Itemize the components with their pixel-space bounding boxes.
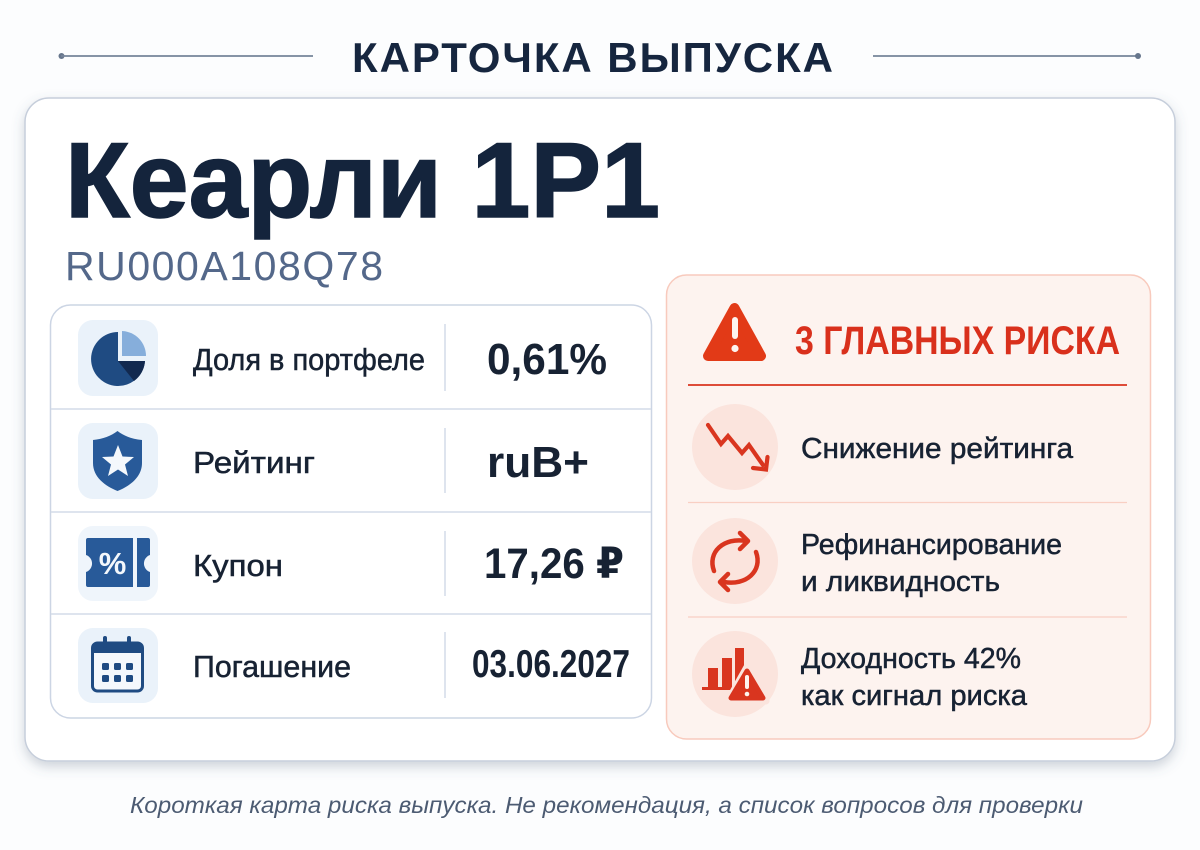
icon: falling chart arrow (692, 404, 778, 490)
page header (58, 34, 1141, 81)
panel: issue parameters (50, 305, 652, 718)
risk 2 text: и ликвидность (801, 566, 1000, 598)
page header: КАРТОЧКА ВЫПУСКА (352, 34, 833, 81)
row: coupon label: Купон (193, 548, 283, 583)
row: rating label: Рейтинг (193, 445, 315, 480)
risk 2 text (801, 529, 1062, 598)
issue title: Кеарли 1Р1 (65, 120, 660, 240)
risks heading: 3 ГЛАВНЫХ РИСКА (795, 319, 1120, 363)
footer note: Короткая карта риска выпуска. Не рекомендация, а список вопросов для проверки (130, 792, 1083, 818)
icon: calendar (78, 628, 158, 703)
row: coupon value: 17,26 ₽ (484, 540, 624, 588)
main card (25, 98, 1175, 761)
icon: coupon ticket (78, 526, 158, 601)
icon: refinancing cycle arrows (692, 518, 778, 604)
row: maturity label: Погашение (193, 649, 351, 684)
icon: warning triangle (708, 308, 761, 356)
risk 3 text: как сигнал риска (801, 680, 1028, 712)
icon: yield bars with warning (692, 631, 778, 717)
icon: shield with star (78, 423, 158, 499)
panel: three main risks (666, 275, 1150, 739)
risk 1 text: Снижение рейтинга (801, 433, 1074, 465)
risk 3 text: Доходность 42% (801, 643, 1021, 675)
row: maturity value: 03.06.2027 (472, 643, 630, 686)
row: rating value: ruB+ (487, 438, 589, 487)
row: share value: 0,61% (487, 335, 607, 384)
risk 2 text: Рефинансирование (801, 529, 1062, 561)
icon: pie chart (78, 320, 158, 396)
icon: coupon ticket: % (99, 546, 126, 581)
ISIN code: RU000A108Q78 (65, 243, 383, 289)
row: share label: Доля в портфеле (193, 342, 425, 377)
risk 3 text (801, 643, 1028, 712)
